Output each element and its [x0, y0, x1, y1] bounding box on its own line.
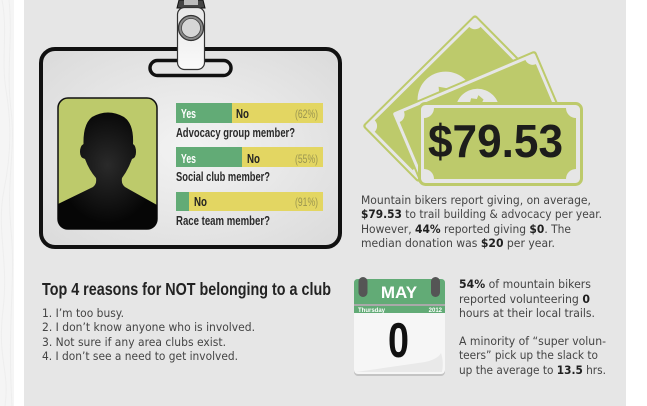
badge clip: [177, 0, 205, 70]
volunteering text: [459, 277, 606, 377]
volunteering text: up the average to 13.5 hrs.: [459, 363, 606, 377]
ID photo: [58, 98, 157, 229]
bar: social club member: (55%): [295, 152, 318, 166]
calendar day and year: 2012: [429, 308, 443, 314]
donation description: median donation was $20 per year.: [361, 236, 555, 250]
bar: social club member: Social club member?: [176, 170, 270, 184]
volunteering text: 54% of mountain bikers: [459, 277, 591, 291]
bar: social club member: Yes: [181, 151, 196, 166]
volunteering text: teers” pick up the slack to: [459, 348, 598, 362]
calendar rings: [358, 277, 440, 297]
donation description: However, 44% reported giving $0. The: [361, 222, 571, 236]
ID badge: [41, 0, 340, 247]
bar: advocacy group member: Advocacy group member?: [176, 126, 295, 140]
bar: race team member: (91%): [295, 195, 318, 209]
badge slot: [150, 60, 231, 76]
bar: advocacy group member: No: [236, 106, 249, 121]
calendar date: 0: [388, 314, 409, 368]
volunteering text: reported volunteering 0: [459, 292, 590, 306]
volunteering text: hours at their local trails.: [459, 306, 595, 320]
donation description: Mountain bikers report giving, on average,: [361, 193, 591, 207]
bar: social club member: [176, 147, 323, 184]
bar: race team member: No: [194, 194, 207, 209]
topographic side strip: [0, 0, 14, 406]
donation description: $79.53 to trail building & advocacy per year.: [361, 207, 602, 221]
reasons heading: Top 4 reasons for NOT belonging to a club: [42, 279, 331, 299]
calendar day and year: Thursday: [358, 308, 386, 314]
calendar month: MAY: [381, 283, 418, 302]
calendar icon: [354, 277, 445, 376]
front bill: [420, 104, 582, 184]
middle bill: [390, 50, 565, 182]
donation amount: $79.53: [428, 115, 563, 167]
bar: race team member: Race team member?: [176, 214, 270, 228]
calendar day and year: [358, 308, 443, 314]
back bill: [362, 14, 531, 183]
bar: race team member: [176, 192, 323, 228]
bar: social club member: No: [247, 151, 260, 166]
reasons list: 3. Not sure if any area clubs exist.: [42, 335, 226, 349]
calendar page curl: [356, 353, 443, 372]
reasons list: 1. I’m too busy.: [42, 306, 124, 320]
bar: advocacy group member: Yes: [181, 106, 196, 121]
badge card: [41, 49, 340, 247]
bar: advocacy group member: [176, 103, 323, 140]
reasons list: [42, 306, 255, 363]
donation description: [361, 193, 602, 250]
money illustration: [362, 14, 582, 184]
bar: advocacy group member: (62%): [295, 107, 318, 121]
reasons list: 4. I don’t see a need to get involved.: [42, 349, 238, 363]
volunteering text: A minority of “super volun-: [459, 334, 606, 348]
reasons list: 2. I don’t know anyone who is involved.: [42, 320, 255, 334]
